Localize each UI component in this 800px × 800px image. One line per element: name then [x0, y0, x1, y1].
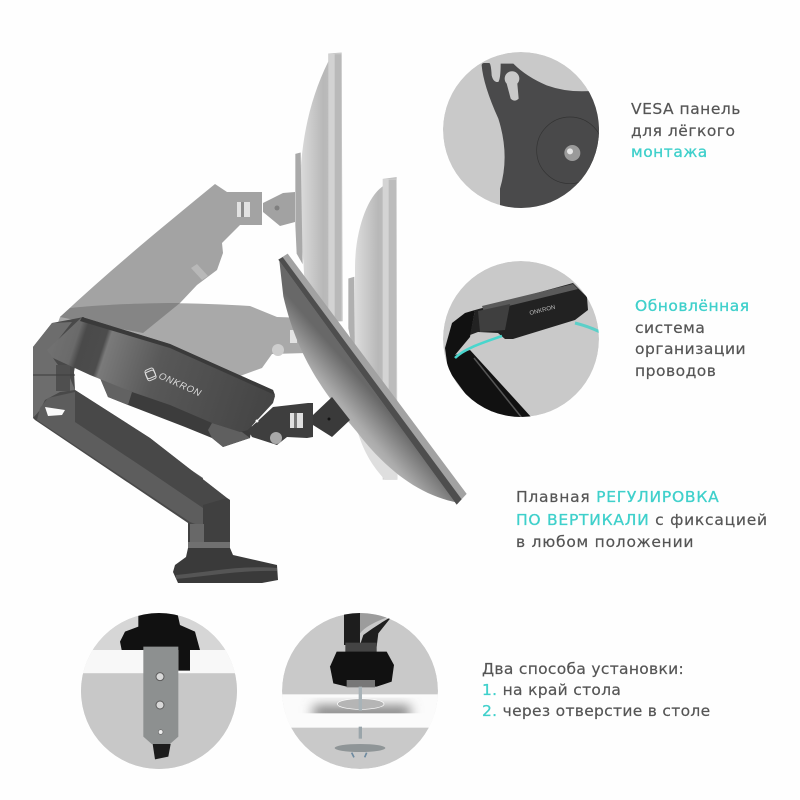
- ghost lower monitor: [348, 177, 397, 480]
- text: cable management: проводов: [635, 362, 716, 380]
- ghost upper monitor: [295, 52, 343, 321]
- brand logo on arm: [141, 365, 203, 399]
- text: cable management: система: [635, 318, 705, 336]
- logo on housing: ONKRON: [529, 305, 556, 317]
- cables: [455, 336, 502, 358]
- text: installation methods: 1. на край стола: [482, 681, 621, 699]
- arm housing: [470, 283, 588, 339]
- monitor hinge bracket: [248, 397, 350, 445]
- text: VESA plate: [631, 100, 741, 161]
- text: vertical adjustment: ПО ВЕРТИКАЛИ с фиксацией: [516, 510, 768, 528]
- text: vertical adjustment: [516, 488, 768, 551]
- text: VESA plate: VESA панель: [631, 100, 741, 118]
- brand logo on arm: ONKRON: [157, 371, 203, 399]
- text: cable management: организации: [635, 340, 746, 358]
- product illustration and detail circles: [33, 52, 599, 769]
- text: installation methods: 2. через отверстие в столе: [482, 702, 710, 720]
- ghost upper arm: [60, 184, 295, 333]
- housing top edge: [80, 317, 275, 395]
- text: installation methods: Два способа установки:: [482, 660, 684, 678]
- desk clamp base: [173, 542, 278, 583]
- lower spring housing: [100, 378, 252, 447]
- text: VESA plate: для лёгкого: [631, 122, 735, 140]
- text: installation methods: [482, 660, 710, 720]
- text: vertical adjustment: Плавная РЕГУЛИРОВКА: [516, 488, 719, 506]
- text: vertical adjustment: в любом положении: [516, 533, 694, 551]
- monitor arm illustration: [33, 52, 467, 583]
- lower arm and column: [33, 317, 230, 542]
- text: cable management: Обновлённая: [635, 297, 750, 315]
- detail circle: cable management: [443, 261, 600, 418]
- text: VESA plate: монтажа: [631, 143, 708, 161]
- detail circle: through-hole mount: [280, 610, 440, 769]
- lower arm in black: [445, 310, 532, 418]
- upper gas housing: [47, 317, 275, 432]
- text: cable management: [635, 297, 750, 380]
- ghost lower arm: [50, 303, 307, 376]
- detail circle: VESA plate: [443, 52, 599, 208]
- tilted monitor: [278, 254, 467, 505]
- detail circle: desk-edge clamp: [81, 613, 237, 769]
